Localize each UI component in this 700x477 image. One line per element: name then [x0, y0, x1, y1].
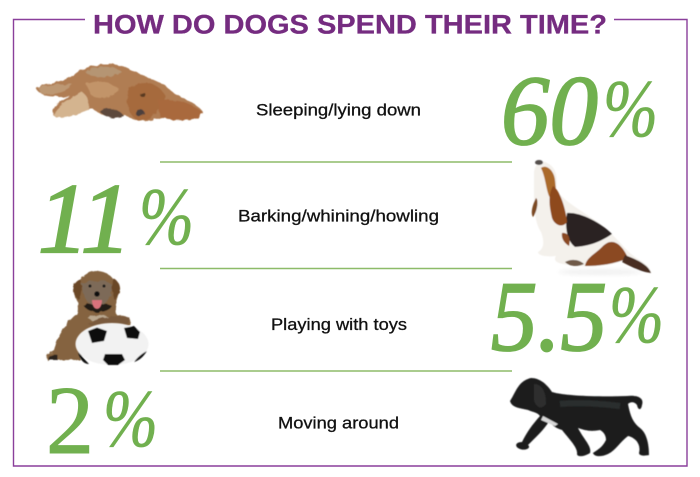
title: HOW DO DOGS SPEND THEIR TIME? [93, 10, 607, 40]
row 1: 60 percent [501, 55, 658, 166]
row 4: 2 percent [46, 367, 158, 475]
row 3: 5.5 percent: % [609, 269, 664, 360]
icon: puppy with soccer ball [47, 271, 131, 360]
row 4: 2 percent: % [103, 373, 158, 464]
icon: black spaniel puppy walking [510, 378, 649, 456]
row 3: 5.5 percent: 5.5 [491, 261, 607, 372]
icon: sleeping spaniel [36, 64, 203, 121]
icon: soccer ball [76, 285, 148, 365]
row 2: 11 percent: % [139, 171, 194, 262]
row 1: sleeping label: Sleeping/lying down [256, 100, 421, 120]
row 2: 11 percent: 11 [38, 163, 131, 274]
divider lines [160, 162, 512, 371]
icon: howling basset hound [532, 160, 651, 275]
row 3: playing label: Playing with toys [271, 315, 407, 334]
row 1: 60 percent: 60 [501, 55, 598, 166]
row 4: moving label: Moving around [278, 414, 399, 432]
row 1: 60 percent: % [603, 63, 658, 154]
row 2: 11 percent [38, 163, 194, 274]
row 2: barking label: Barking/whining/howling [238, 206, 439, 226]
row 4: 2 percent: 2 [46, 367, 94, 475]
